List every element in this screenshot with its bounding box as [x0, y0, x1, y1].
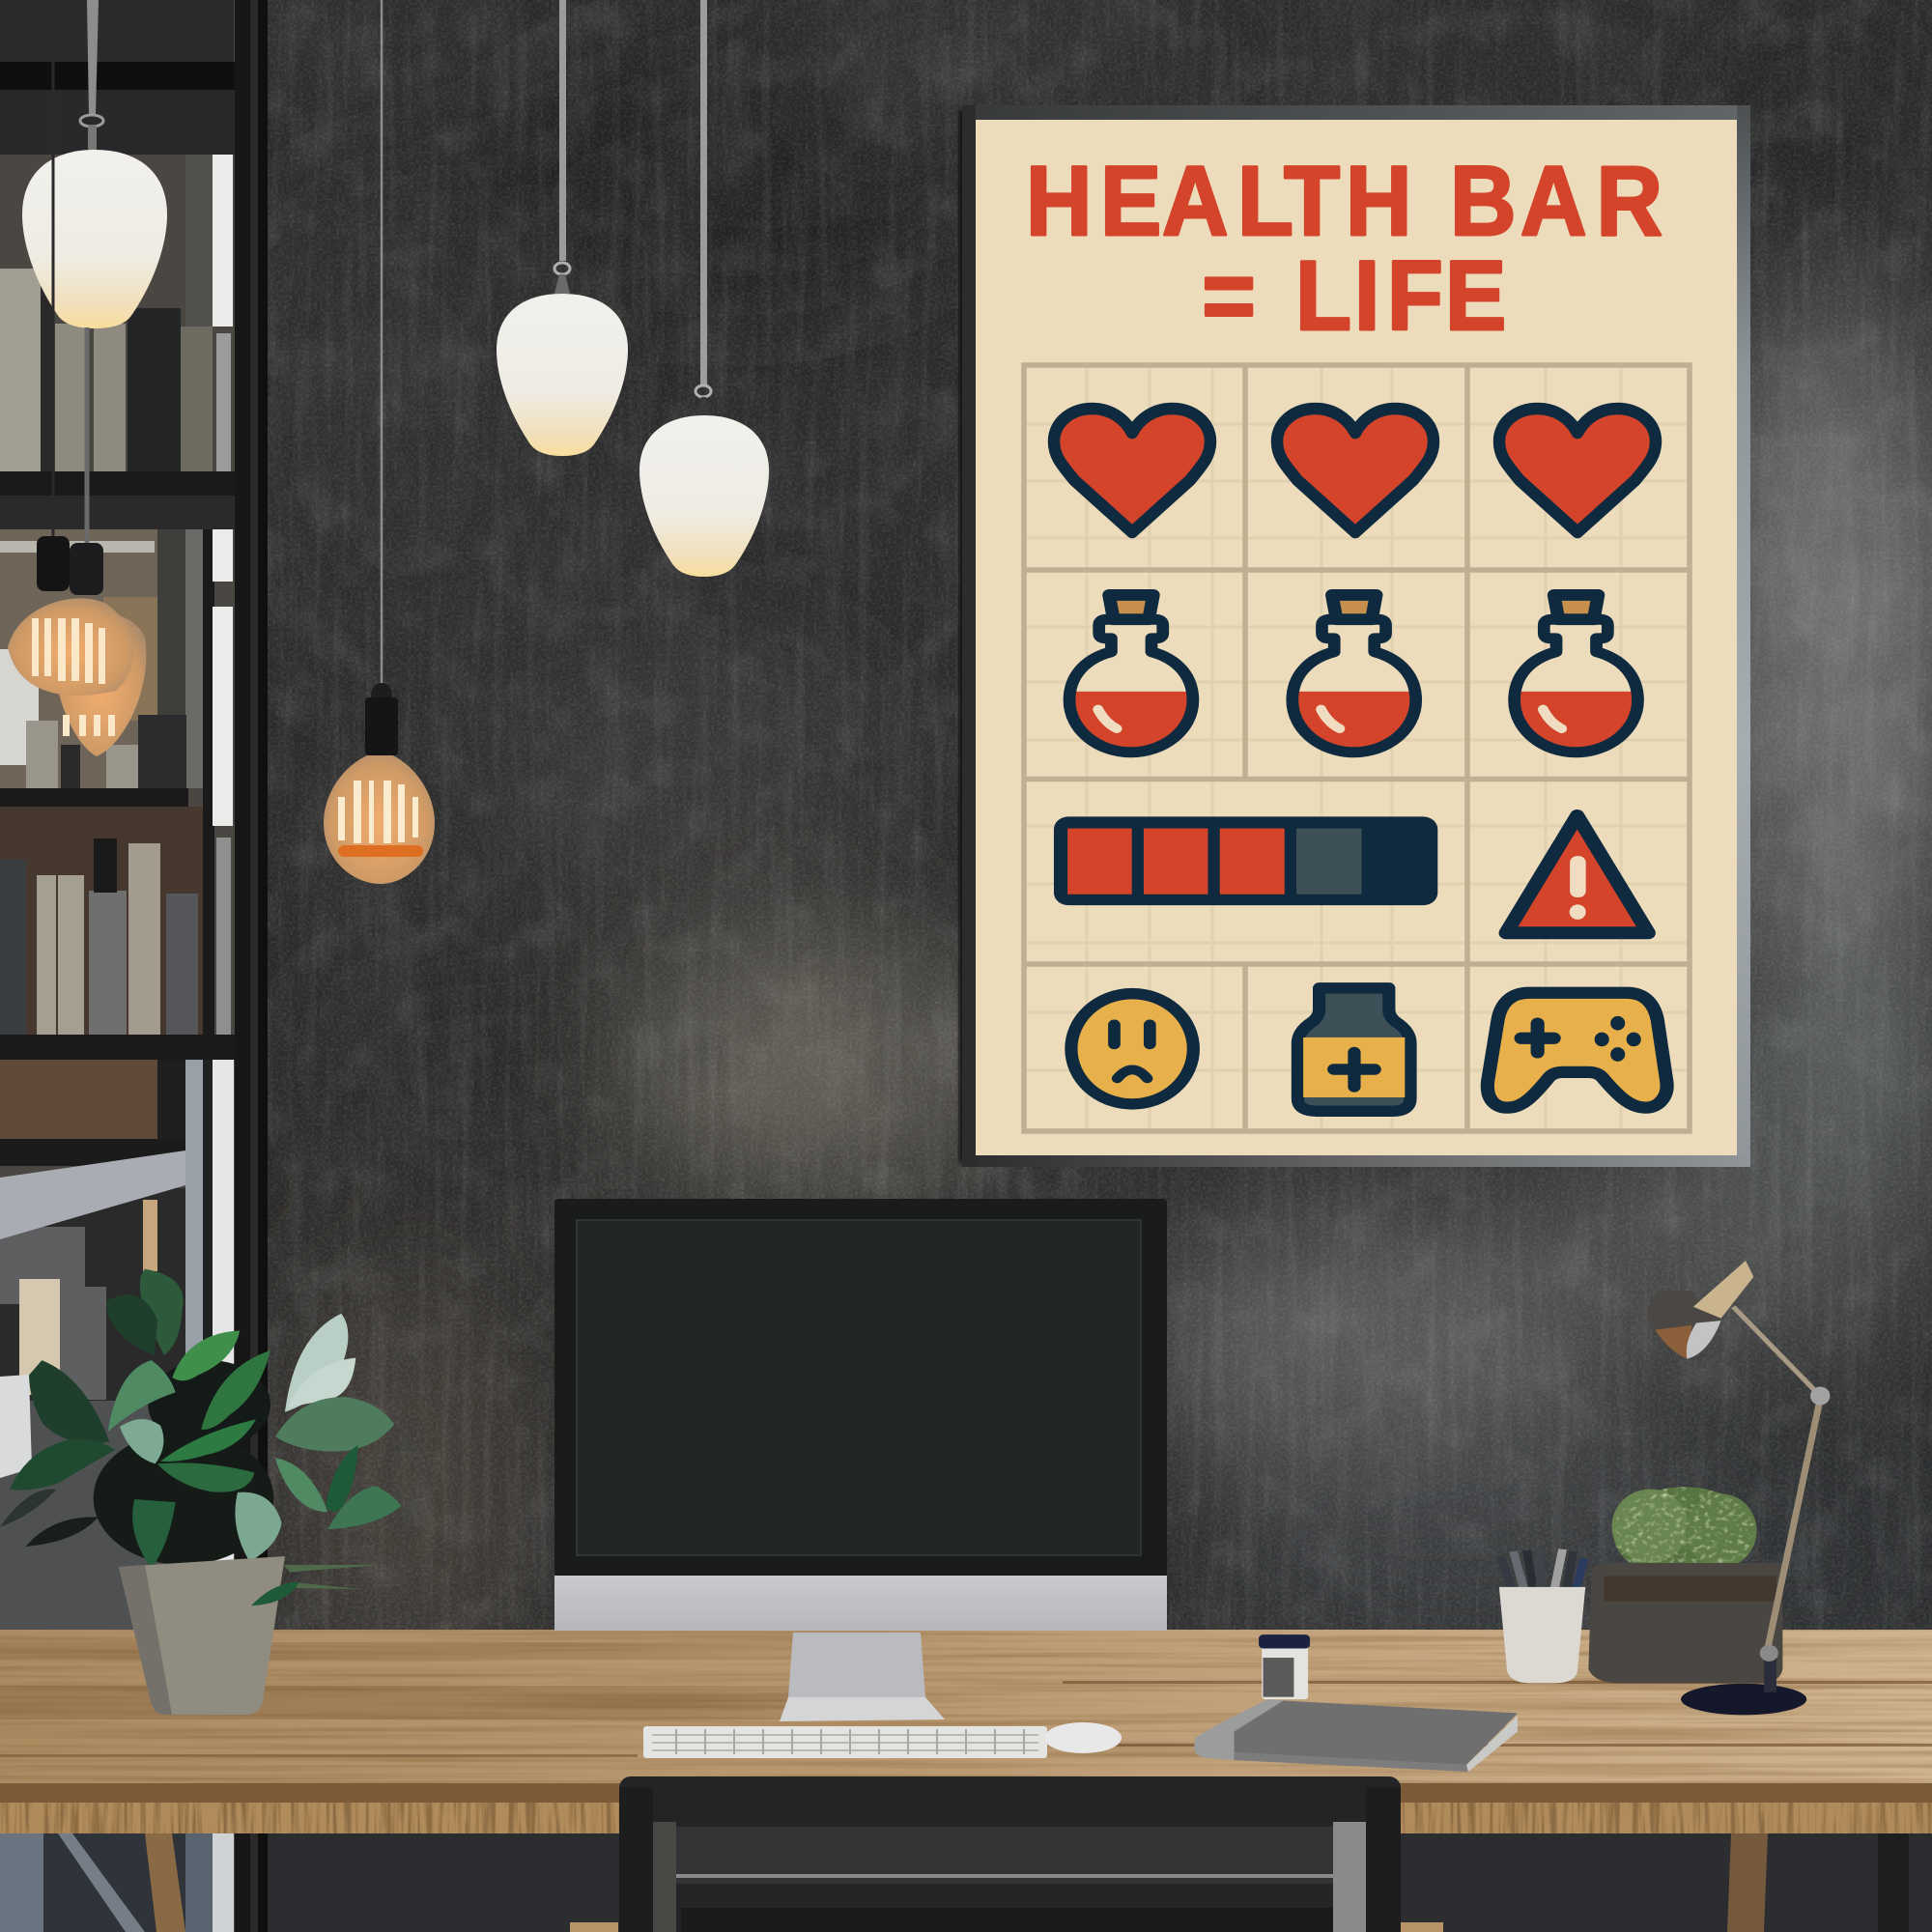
planter with herb: [1588, 1487, 1782, 1683]
title: = LIFE: [1202, 241, 1506, 351]
icon: potion flask 3: [1515, 595, 1637, 753]
keyboard and mouse: [643, 1722, 1122, 1758]
middle row of books: [26, 715, 186, 788]
pendant lamp: left pair of Edison bulbs: [8, 0, 146, 756]
icon: medicine jar: [1297, 988, 1410, 1111]
icon: heart 2: [1277, 409, 1434, 532]
icon: potion flask 2: [1293, 595, 1416, 753]
potted plant: [0, 1269, 402, 1715]
title: [1026, 146, 1662, 351]
pendant lamp: centre-left white shade: [497, 0, 628, 456]
lower row of books: [0, 838, 198, 1035]
office chair: [570, 1776, 1443, 1932]
notebook: [1194, 1699, 1518, 1772]
monitor: [554, 1199, 1167, 1721]
desk items: bottle, notebook, pen cup, planter, desk lamp: [1194, 1261, 1830, 1772]
concrete wall background: [268, 0, 1932, 1630]
icon: potion flask 1: [1069, 595, 1193, 753]
pendant lamp: left white shade: [22, 0, 167, 328]
top row of books: [0, 155, 233, 471]
title: HEALTH BAR: [1026, 146, 1662, 256]
pen cup: [1499, 1549, 1585, 1683]
icon: heart 1: [1054, 409, 1210, 532]
icon: heart 3: [1499, 409, 1656, 532]
desk front edge: [0, 1783, 1932, 1833]
icon: game controller: [1488, 993, 1667, 1108]
poster frame: [959, 105, 1750, 1167]
icon: sad face: [1071, 994, 1193, 1104]
pendant lamp: hanging Edison bulb: [324, 0, 435, 884]
icon grid lines: [1024, 365, 1690, 1131]
poster: Health Bar = Life: [976, 120, 1737, 1155]
pendant lamp: centre-right white shade: [639, 0, 769, 577]
bookshelf: [0, 0, 268, 1932]
health bar icon: [1054, 816, 1437, 905]
desk: [0, 1630, 1932, 1932]
small bottle: [1259, 1634, 1310, 1699]
icon: warning triangle: [1506, 816, 1648, 933]
desk lamp: [1647, 1261, 1830, 1715]
